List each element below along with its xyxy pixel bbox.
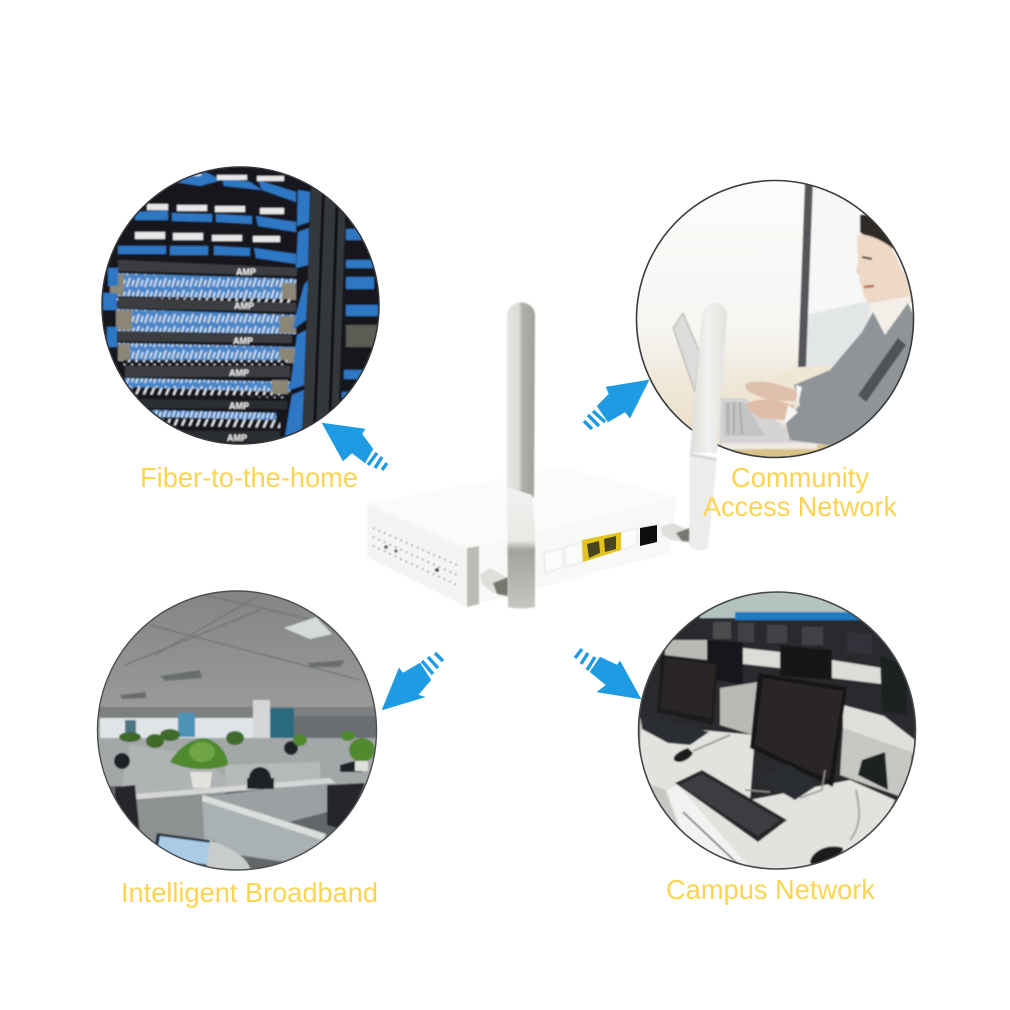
photo circle: community access network, woman at laptop xyxy=(634,178,916,460)
label: Fiber-to-the-home: Fiber-to-the-home xyxy=(140,462,358,493)
photo circle: fiber-to-the-home server rack xyxy=(100,165,382,447)
ethernet ports xyxy=(582,532,621,562)
photo circle: fiber-to-the-home server rack: AMP xyxy=(233,336,253,346)
label: Community: Community xyxy=(731,462,869,493)
arrow: to community access network xyxy=(584,380,649,429)
optical port xyxy=(640,525,657,546)
right antenna xyxy=(689,302,727,550)
photo circle: fiber-to-the-home server rack: AMP xyxy=(229,401,249,411)
label: Campus Network: Campus Network xyxy=(666,874,875,905)
photo circle: intelligent broadband, office floor xyxy=(95,589,380,880)
label: Intelligent Broadband: Intelligent Broadband xyxy=(121,877,378,908)
arrow: to intelligent broadband xyxy=(382,653,443,710)
left antenna xyxy=(507,302,535,608)
right antenna connector xyxy=(661,523,692,543)
router top and side faces xyxy=(367,467,677,607)
photo circle: fiber-to-the-home server rack: AMP xyxy=(234,301,254,311)
arrow: to fiber-to-the-home xyxy=(322,423,387,470)
router: white ONU body with two antennas xyxy=(367,302,727,608)
left antenna connector xyxy=(480,568,508,597)
photo circle: fiber-to-the-home server rack: AMP xyxy=(236,267,256,277)
arrow: to campus network xyxy=(575,649,641,699)
label: Access Network: Access Network xyxy=(703,491,897,522)
photo circle: fiber-to-the-home server rack: AMP xyxy=(227,433,247,443)
photo circle: campus network, computer lab xyxy=(636,589,918,885)
photo circle: fiber-to-the-home server rack: AMP xyxy=(229,368,249,378)
